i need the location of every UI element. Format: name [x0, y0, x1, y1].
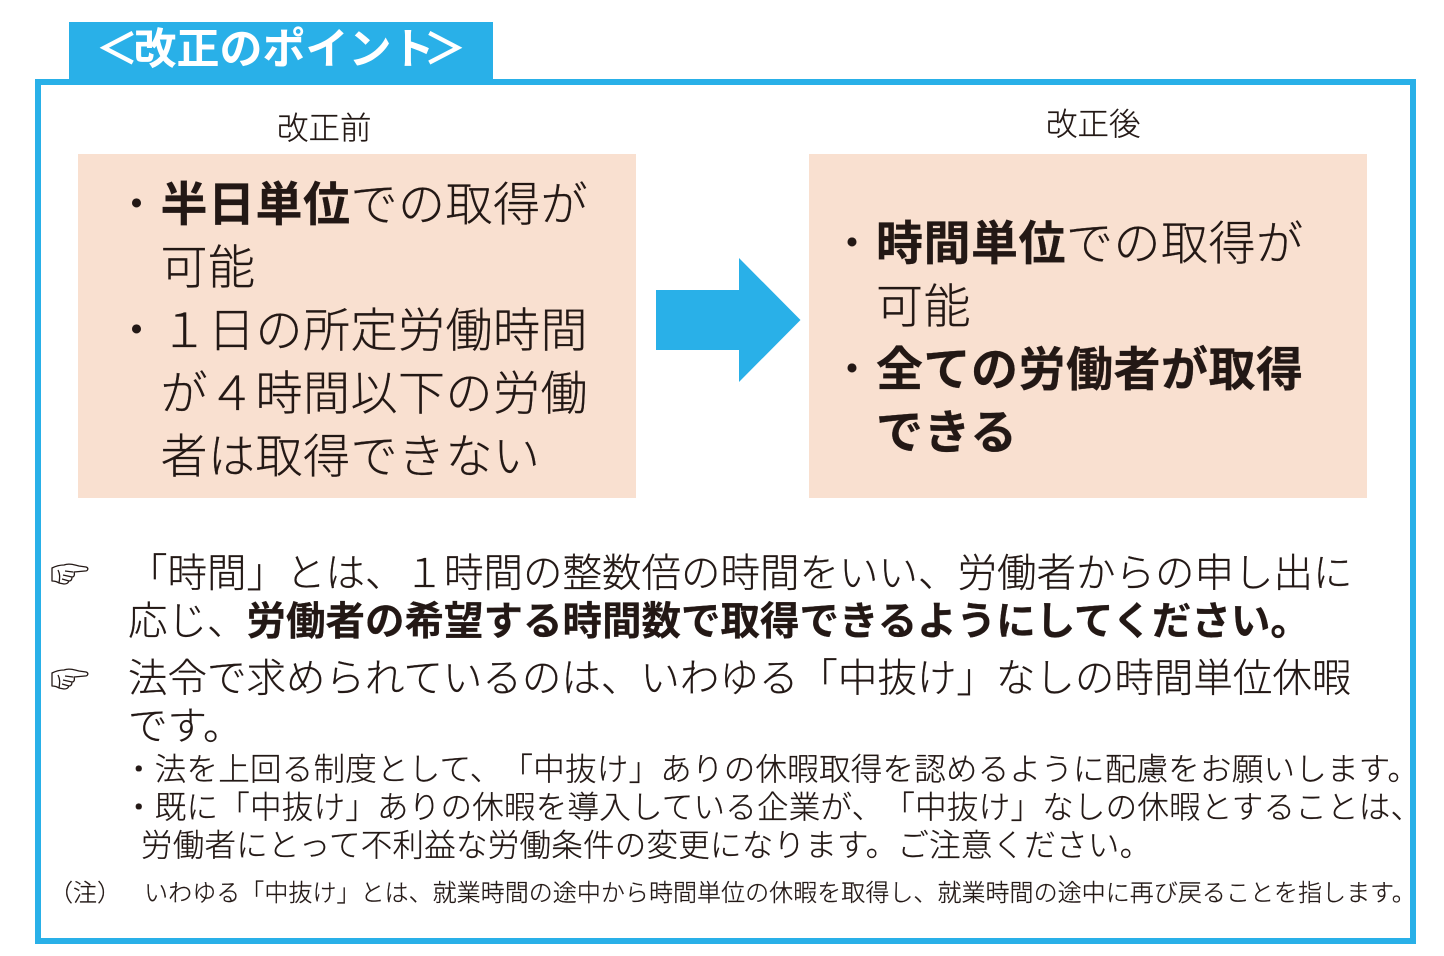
after text: ・時間単位での取得が	[828, 217, 1304, 270]
note 2 text: です。	[128, 705, 243, 749]
after text	[828, 217, 1304, 459]
heading: before: 改正前	[277, 110, 372, 146]
before text: 可能	[160, 241, 256, 294]
before text	[113, 178, 588, 483]
before text: 者は取得できない	[160, 430, 540, 483]
arrow	[656, 258, 800, 382]
note 2 text	[128, 657, 1351, 749]
before text: ・１日の所定労働時間	[113, 304, 588, 357]
note 2 text: 法令で求められているのは、いわゆる「中抜け」なしの時間単位休暇	[128, 657, 1351, 701]
before text: が４時間以下の労働	[160, 367, 588, 420]
sub notes: ・既に「中抜け」ありの休暇を導入している企業が、「中抜け」なしの休暇とすることは、	[123, 789, 1422, 825]
after text: 可能	[876, 280, 971, 333]
after text: ・全ての労働者が取得	[828, 343, 1304, 396]
before text: ・半日単位での取得が	[113, 178, 588, 231]
icon: pointing hand 1	[51, 564, 88, 585]
sub notes	[123, 751, 1422, 863]
title tab	[69, 22, 493, 82]
footnote: （注） いわゆる「中抜け」とは、就業時間の途中から時間単位の休暇を取得し、就業時間の途中に再び戻ることを指します。	[49, 880, 1416, 906]
panel: before revision	[78, 154, 636, 498]
title text: ＜改正のポイント＞	[96, 26, 466, 74]
panel: after revision	[809, 154, 1367, 498]
icon: pointing hand 2	[51, 668, 88, 690]
sub notes: ・法を上回る制度として、「中抜け」ありの休暇取得を認めるように配慮をお願いします。	[123, 751, 1419, 787]
note 1 text: 応じ、労働者の希望する時間数で取得できるようにしてください。	[128, 600, 1310, 644]
note 1 text: 「時間」とは、１時間の整数倍の時間をいい、労働者からの申し出に	[128, 552, 1352, 596]
after text: できる	[876, 406, 1018, 459]
sub notes: 労働者にとって不利益な労働条件の変更になります。ご注意ください。	[141, 827, 1151, 863]
heading: after: 改正後	[1046, 106, 1141, 142]
note 1 text	[128, 552, 1352, 644]
